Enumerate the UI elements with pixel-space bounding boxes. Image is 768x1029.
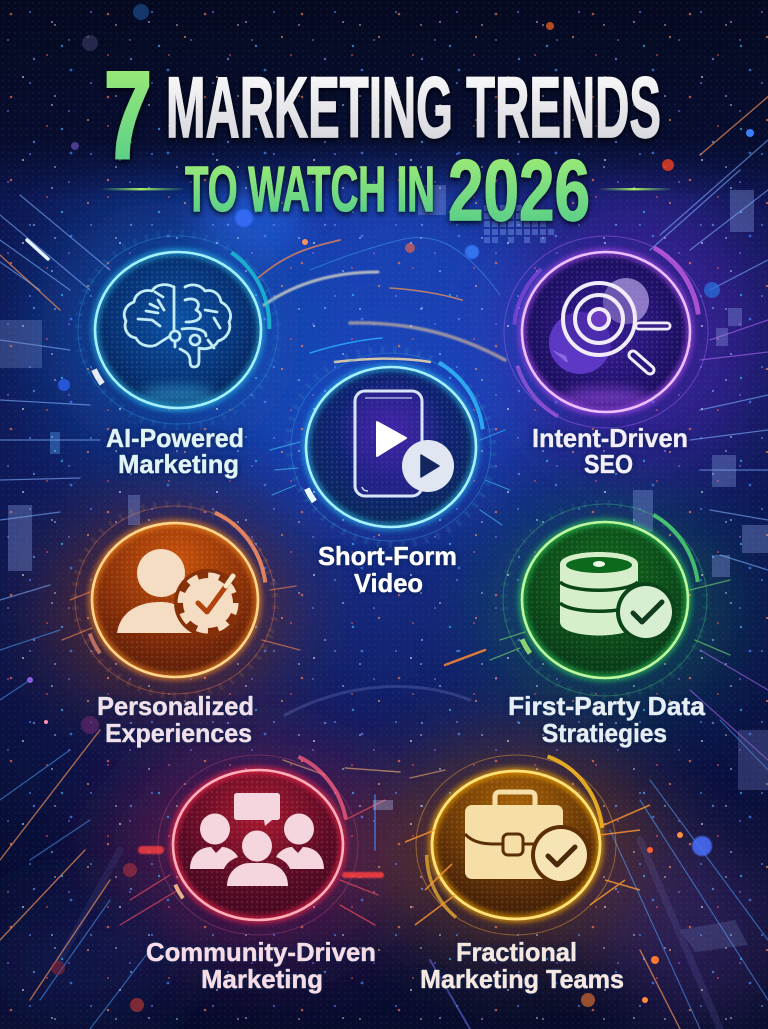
- subtitle side line right: [598, 188, 670, 190]
- label: Fractional Marketing Teams: Fractional: [456, 937, 577, 967]
- label: Short-Form Video: [318, 541, 457, 598]
- label: Community-Driven Marketing: Marketing: [201, 964, 323, 994]
- ring: AI-Powered: [50, 201, 306, 459]
- icon: database with check: [560, 552, 676, 642]
- title: [104, 47, 661, 239]
- subtitle: 2026: 2026: [448, 143, 590, 239]
- label: Personalized Experiences: Experiences: [105, 718, 252, 748]
- title: numeral 7: 7: [104, 47, 152, 185]
- panel: Intent-Driven SEO: [478, 202, 734, 479]
- label: AI-Powered Marketing: AI-Powered: [106, 423, 244, 453]
- label: Fractional Marketing Teams: Marketing Teams: [420, 964, 624, 994]
- label: First-Party Data Strategies: [508, 691, 706, 748]
- panel: First-Party Data Strategies: [476, 469, 734, 748]
- label: Personalized Experiences: [97, 691, 254, 748]
- panel: Short-Form Video: [261, 317, 521, 598]
- panel: Personalized Experiences: [48, 475, 302, 748]
- label: First-Party Data Strategies: First-Party Data: [508, 691, 706, 721]
- label: Community-Driven Marketing: Community-Driven: [146, 937, 376, 967]
- icon: briefcase with check: [465, 792, 591, 885]
- icon: brain: [124, 285, 231, 367]
- side light bars: [138, 846, 384, 878]
- label: Community-Driven Marketing: [146, 937, 376, 994]
- icon: community group with chat bubble: [190, 793, 324, 886]
- ring: Intent-Driven: [478, 202, 734, 462]
- panel: Community-Driven Marketing: [136, 720, 384, 994]
- icon: target magnifier and chat: [549, 278, 667, 374]
- panel: Fractional Marketing Teams: [390, 718, 650, 994]
- ring: Short-Form: [261, 317, 521, 577]
- ring: Community-Driven: [136, 720, 380, 970]
- subtitle: to watch in: TO WATCH IN: [185, 153, 435, 225]
- label: AI-Powered Marketing: Marketing: [118, 449, 239, 479]
- panel: AI-Powered Marketing: [50, 201, 306, 479]
- label: Intent-Driven SEO: Intent-Driven: [532, 423, 688, 453]
- label: Intent-Driven SEO: [532, 423, 688, 479]
- icon: person with gear and check: [117, 549, 242, 637]
- label: AI-Powered Marketing: [106, 423, 244, 479]
- ring: Personalized: [48, 475, 302, 725]
- ring: Fractional: [390, 718, 642, 972]
- orange spark rays: [405, 805, 650, 925]
- icon: phone with play buttons: [355, 391, 454, 496]
- label: Intent-Driven SEO: SEO: [584, 449, 633, 479]
- label: Short-Form Video: Video: [354, 568, 423, 598]
- label: Short-Form Video: Short-Form: [318, 541, 457, 571]
- ring: First-Party Data: [476, 469, 734, 731]
- label: Personalized Experiences: Personalized: [97, 691, 254, 721]
- decorative grid block: [484, 205, 554, 243]
- label: Fractional Marketing Teams: [420, 937, 624, 994]
- subtitle side line left: [100, 188, 182, 190]
- label: First-Party Data Strategies: Stratiegies: [542, 718, 667, 748]
- background data panels: [0, 185, 768, 952]
